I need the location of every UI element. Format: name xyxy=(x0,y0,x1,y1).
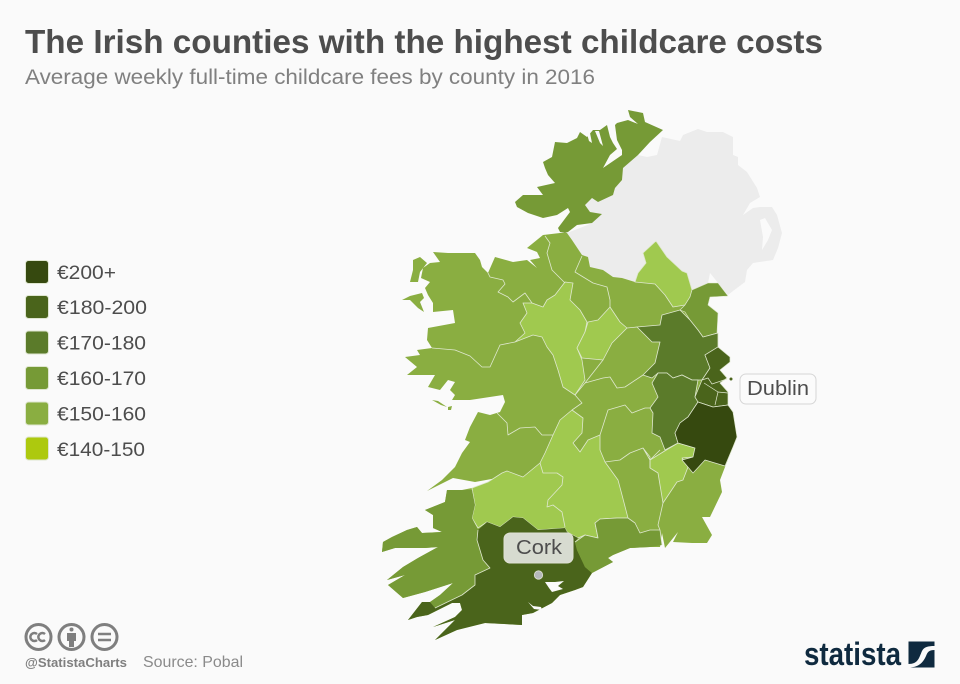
Northern Ireland xyxy=(567,129,782,295)
icon: cc xyxy=(26,624,51,650)
callout: Cork xyxy=(504,533,573,563)
Kerry xyxy=(382,490,490,608)
Carlow xyxy=(650,443,695,503)
legend item: 140-150 xyxy=(26,437,145,461)
map of Ireland xyxy=(382,110,782,640)
Cork xyxy=(408,517,592,640)
Strangford Lough xyxy=(760,218,772,250)
Wicklow xyxy=(675,402,737,473)
legend item: 170-180 xyxy=(26,331,146,354)
callout: Dublin: Dublin xyxy=(747,378,809,400)
legend item: 200+: €200+ xyxy=(57,263,116,284)
point: Cork city xyxy=(534,571,543,579)
callout: Dublin xyxy=(740,374,816,404)
icon: attribution xyxy=(59,624,84,650)
Longford xyxy=(577,307,627,360)
Louth xyxy=(680,283,728,337)
legend xyxy=(26,260,147,461)
Aran Islands xyxy=(432,400,452,410)
title: The Irish counties with the highest childcare costs xyxy=(25,23,823,60)
legend item: 160-170: €160-170 xyxy=(57,369,146,390)
legend item: 170-180: €170-180 xyxy=(57,334,146,354)
Kildare xyxy=(650,373,698,450)
Meath xyxy=(637,310,718,380)
legend item: 160-170 xyxy=(26,366,146,390)
Republic base: counties at 150-160 xyxy=(382,233,737,640)
licence icons xyxy=(26,624,117,650)
legend item: 140-150: €140-150 xyxy=(57,440,145,461)
callout: Cork: Cork xyxy=(516,537,563,559)
Statista logo: statista xyxy=(804,636,901,672)
Mullet peninsula xyxy=(410,257,427,282)
legend item: 180-200: €180-200 xyxy=(57,298,147,319)
handle: @StatistaCharts xyxy=(25,656,127,670)
Dublin xyxy=(695,347,730,407)
subtitle: Average weekly full-time childcare fees by county in 2016 xyxy=(25,66,595,89)
Achill Island xyxy=(402,293,424,312)
legend item: 150-160: €150-160 xyxy=(57,404,146,426)
Donegal inlets xyxy=(587,131,603,146)
Limerick and Tipperary xyxy=(472,410,628,538)
legend item: 200+ xyxy=(26,260,116,284)
Waterford xyxy=(575,518,662,573)
Cork Harbour inlets xyxy=(528,581,564,610)
legend item: 180-200 xyxy=(26,296,147,319)
Dublin island dot xyxy=(730,378,732,380)
Monaghan xyxy=(635,241,692,307)
Dublin inner borders xyxy=(702,378,728,405)
icon: no derivatives xyxy=(92,624,117,650)
Roscommon xyxy=(515,282,587,395)
Donegal xyxy=(515,110,663,233)
source: Source: Pobal xyxy=(143,654,243,671)
legend item: 150-160 xyxy=(26,402,146,426)
county borders xyxy=(432,236,663,608)
